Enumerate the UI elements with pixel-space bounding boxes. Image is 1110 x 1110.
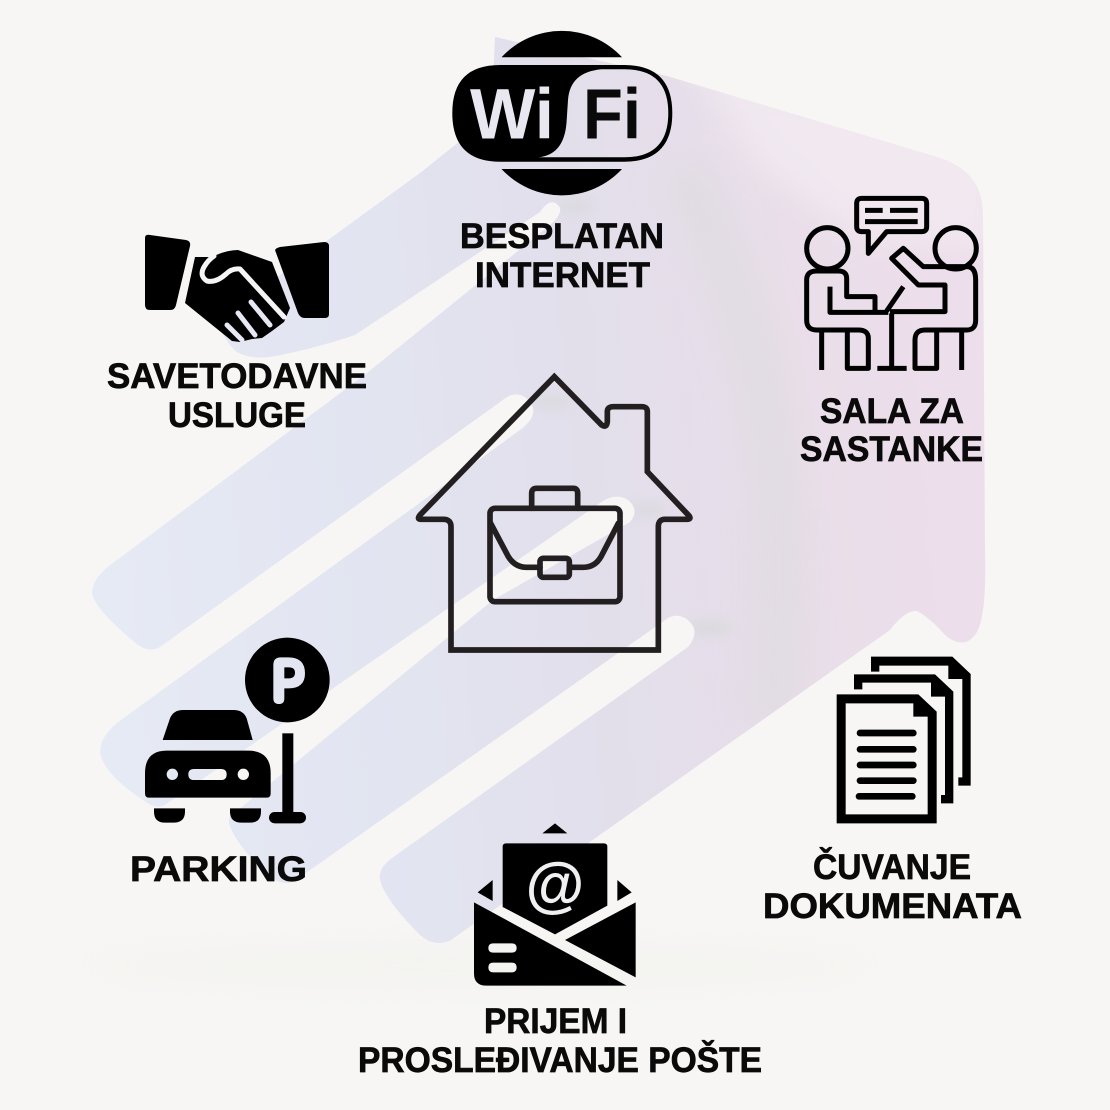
service: document storage (763, 657, 1022, 926)
label: parking: PARKING (130, 850, 307, 889)
label: savetodavne usluge: SAVETODAVNE (107, 357, 367, 396)
service: advisory (107, 235, 367, 435)
icon: wifi logo (452, 31, 672, 195)
label: sala za sastanke: SALA ZA (820, 392, 964, 431)
icon: document stack (837, 657, 971, 823)
background: floor shadow (80, 943, 880, 987)
central icon: house with briefcase (418, 377, 690, 650)
label: čuvanje dokumenata: ČUVANJE (813, 847, 971, 887)
service: wifi (452, 31, 672, 295)
icon: car and parking sign (145, 638, 330, 823)
service: parking (130, 638, 330, 889)
infographic canvas (92, 30, 1022, 1073)
icon: wifi logo: Wi (470, 75, 554, 154)
label: savetodavne usluge (107, 357, 367, 435)
label: besplatan internet: BESPLATAN (460, 217, 664, 256)
label: prijem i prosleđivanje pošte: PROSLEĐIVANJE POŠTE (358, 1040, 762, 1080)
icon: envelope (474, 823, 636, 986)
label: besplatan internet: INTERNET (475, 256, 650, 295)
icon: handshake (145, 235, 329, 342)
background: gradient hand shape (92, 37, 1000, 943)
label: savetodavne usluge: USLUGE (168, 396, 306, 435)
icon: wifi logo: Fi (583, 75, 641, 154)
label: čuvanje dokumenata (763, 847, 1022, 926)
label: sala za sastanke (800, 392, 983, 469)
label: prijem i prosleđivanje pošte: PRIJEM I (484, 1002, 627, 1041)
label: čuvanje dokumenata: DOKUMENATA (763, 887, 1022, 926)
service: meeting room (800, 198, 983, 469)
icon: meeting (807, 198, 976, 370)
label: sala za sastanke: SASTANKE (800, 430, 983, 469)
icon: envelope: @ (526, 851, 584, 920)
service: mail (358, 823, 762, 1080)
label: besplatan internet (460, 217, 664, 295)
label: prijem i prosleđivanje pošte (358, 1002, 762, 1080)
